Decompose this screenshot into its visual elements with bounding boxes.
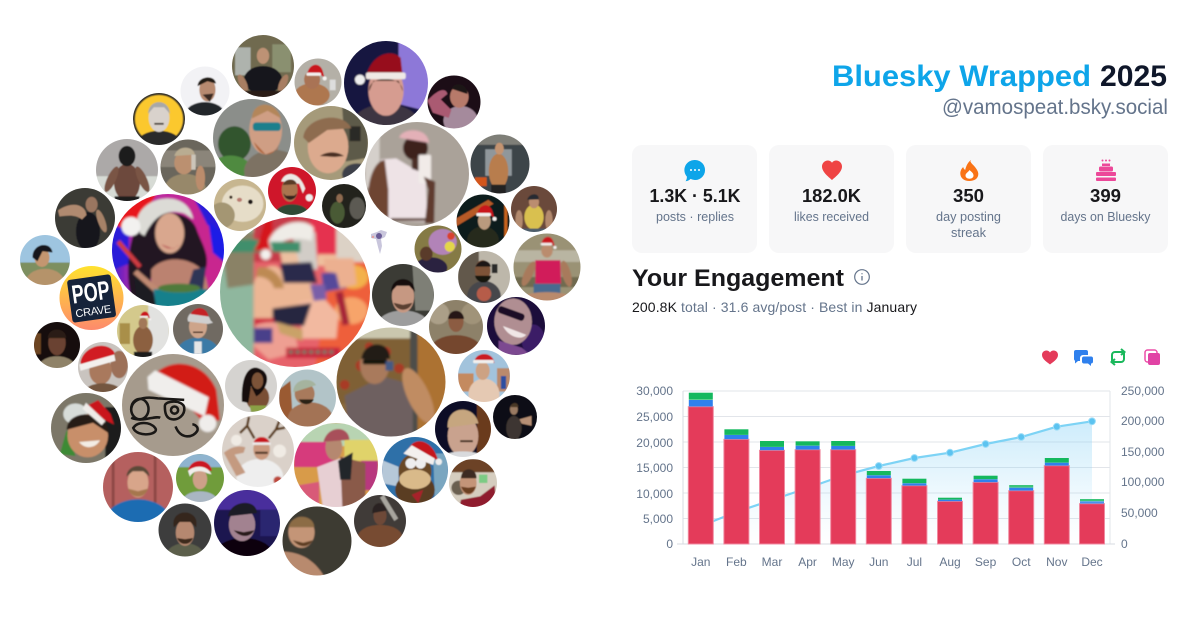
grid: [677, 391, 1115, 544]
avatar: pink tank with santa hat: [514, 234, 580, 300]
month labels: Mar: [762, 555, 782, 569]
avatar: glasses shirtless on dark wall: [282, 506, 352, 576]
avatar: profile on white: [180, 66, 230, 116]
card: likes received: [769, 145, 894, 253]
stat label second line: streak: [951, 226, 987, 240]
month labels: Feb: [726, 555, 747, 569]
avatar: purple room with cap: [214, 490, 280, 556]
icon: quotes: [1145, 350, 1160, 365]
card: day posting streak: [906, 145, 1031, 253]
title: Bluesky Wrapped: [832, 60, 1091, 93]
avatar: grey tee portrait: [372, 264, 434, 326]
avatar: pink cap at beach bar: [290, 419, 382, 511]
avatar: dark room pointing: [491, 393, 539, 441]
avatar: smiling with santa hat, purple light: [344, 41, 428, 125]
icon: reposts: [1112, 349, 1124, 365]
month labels: Oct: [1012, 555, 1031, 569]
month labels: Jul: [907, 555, 922, 569]
month labels: Jun: [869, 555, 888, 569]
stat label: day posting: [936, 210, 1001, 224]
bar: Feb: [724, 429, 749, 544]
avatar: beard and graphic tee: [458, 251, 510, 303]
stat value: 350: [953, 186, 984, 206]
avatar: dark tank with oiled chest: [351, 492, 409, 550]
month labels: [691, 555, 1103, 569]
cumulative line: [701, 421, 1092, 526]
avatar: cap reclining: [279, 370, 336, 426]
avatar: glasses in purple tint: [484, 294, 548, 358]
small pixel sprite: [371, 230, 387, 254]
avatar: man at table: [232, 35, 294, 97]
right axis labels: 0: [1121, 537, 1128, 551]
avatar: pool santa in white tank: [455, 347, 513, 410]
avatar: flowers bouquet: [414, 226, 462, 272]
avatar: red background santa: [268, 167, 316, 215]
avatar: shirtless hallway santa: [117, 305, 169, 357]
month labels: Sep: [975, 555, 997, 569]
month labels: Dec: [1081, 555, 1103, 569]
left axis labels: 25,000: [636, 410, 673, 424]
chart: monthly engagement: [636, 384, 1165, 569]
right axis labels: 50,000: [1121, 506, 1158, 520]
avatar: blue jacket santa: [173, 304, 223, 354]
avatar: Pop Crave logo: CRAVE: [75, 303, 112, 320]
avatar: red tee with sticky note: [447, 457, 499, 509]
bar: May: [831, 441, 856, 544]
left axis labels: 5,000: [643, 512, 673, 526]
left axis labels: 20,000: [636, 436, 673, 450]
left axis labels: 30,000: [636, 384, 673, 398]
avatar: flexing in black tank: [55, 188, 115, 248]
avatar: doodle face with santa hat: [122, 354, 224, 456]
bar: Apr: [795, 441, 820, 544]
icon: cake: [1096, 160, 1116, 181]
cumulative area: [701, 421, 1092, 544]
left axis labels: 10,000: [636, 487, 673, 501]
bar: Aug: [938, 498, 962, 544]
bar: Nov: [1044, 458, 1069, 544]
avatar: santa in dark with orange beams: [456, 194, 510, 248]
stat value: 399: [1090, 186, 1121, 206]
stat value: 182.0K: [802, 186, 861, 206]
right axis labels: 100,000: [1121, 475, 1165, 489]
avatar: shirtless mirror selfie: [96, 139, 158, 201]
left axis labels: [636, 384, 673, 551]
month labels: Nov: [1046, 555, 1067, 569]
bar: Dec: [1080, 499, 1104, 544]
panel: avatar bubble cluster: [18, 32, 584, 579]
avatar: flexing in purple light: [428, 76, 480, 128]
panel: stat cards: [632, 145, 1168, 253]
stat label: days on Bluesky: [1060, 210, 1151, 224]
right axis labels: 250,000: [1121, 384, 1165, 398]
card: posts and replies: [632, 145, 757, 253]
avatar: Pop Crave logo: [60, 266, 124, 330]
bar: Jul: [902, 479, 927, 544]
avatar: santa hat phone selfie: [294, 58, 342, 106]
avatar: yellow background portrait: [133, 93, 185, 145]
avatar: hamster: [214, 179, 266, 231]
bar: Mar: [760, 441, 784, 544]
bar: Sep: [973, 476, 998, 544]
bar: Jun: [866, 471, 891, 544]
left axis labels: 0: [666, 537, 673, 551]
avatar: cartoon ape with santa hat: [379, 434, 451, 506]
avatar: anime fighter with santa hat: [220, 217, 370, 367]
bar: Jan: [688, 393, 713, 544]
avatar: cap and phone selfie: [160, 140, 216, 194]
line markers: [875, 418, 1095, 469]
card: days on Bluesky: [1043, 145, 1168, 253]
avatar: curly hair on leather sofa: [158, 504, 212, 556]
icon: info: [855, 270, 869, 284]
month labels: Jan: [691, 555, 710, 569]
avatar: Pop Crave logo: POP: [70, 275, 112, 310]
handle: @vamospeat.bsky.social: [942, 96, 1168, 119]
left axis labels: 15,000: [636, 461, 673, 475]
avatar: mirror selfie with patterned wall: [331, 322, 451, 442]
title: 2025: [1100, 60, 1167, 93]
avatar: cap and moustache: [294, 106, 368, 180]
stat value: 1.3K · 5.1K: [650, 186, 740, 206]
avatar: shirtless in bed: [426, 297, 486, 365]
avatar: white tee with reindeer antlers: [222, 415, 294, 487]
avatar: laughing with christmas tree: [51, 393, 121, 463]
month labels: Apr: [798, 555, 817, 569]
heading: your engagement: Your Engagement: [632, 265, 844, 292]
avatar: sunglasses selfie with garden: [213, 99, 291, 177]
icon: heart: [822, 160, 842, 180]
right axis labels: 200,000: [1121, 414, 1165, 428]
right axis labels: 150,000: [1121, 445, 1165, 459]
icon: speech bubble: [684, 160, 705, 181]
avatar: gym torso: [470, 134, 530, 194]
stat label: likes received: [794, 210, 869, 224]
stat label: posts · replies: [656, 210, 734, 224]
avatar: sunny selfie with necklace: [20, 235, 70, 285]
avatar: mirror selfie in white tank with pink durag: [365, 122, 469, 226]
avatar: lying down with santa hat: [78, 342, 128, 392]
legend icons: [1042, 349, 1160, 366]
avatar: woman with santa hat on blue and pink: [112, 194, 224, 306]
bar: Oct: [1009, 485, 1034, 544]
avatar: beige beanie close-up: [432, 398, 494, 465]
engagement summary: 200.8K total · 31.6 avg/post · Best in January: [632, 299, 917, 315]
icon: likes: [1042, 350, 1058, 364]
icon: replies: [1074, 350, 1093, 366]
stacked bars: [688, 393, 1104, 544]
right axis labels: [1121, 384, 1165, 551]
icon: flame: [960, 160, 978, 181]
avatar: blue shirt on red barn: [103, 452, 173, 522]
month labels: Aug: [939, 555, 961, 569]
avatar: vineyard santa: [176, 454, 224, 502]
avatar: yellow tank with cap: [511, 186, 557, 232]
avatar: dark gym: [322, 184, 366, 228]
month labels: May: [832, 555, 855, 569]
avatar: dark portrait with glasses: [34, 322, 80, 368]
avatar: woman with long dark hair: [225, 360, 277, 412]
